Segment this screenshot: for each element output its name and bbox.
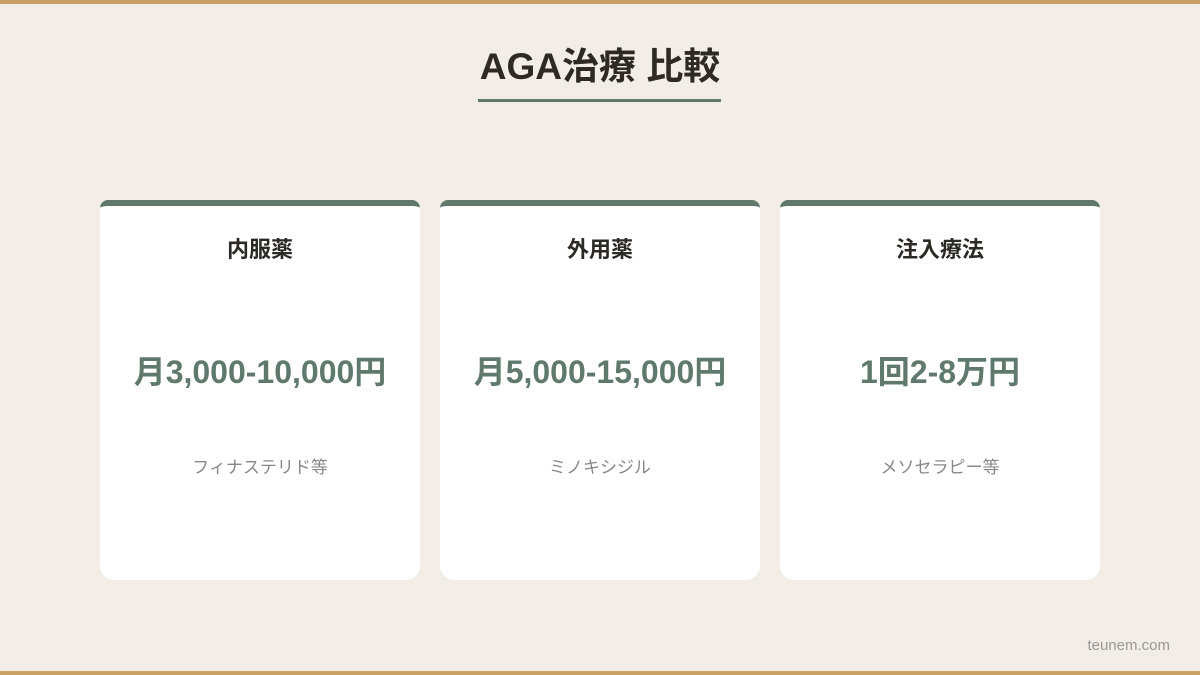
panel: 内服薬 — [100, 200, 420, 580]
title: AGA治療 比較 — [480, 46, 720, 87]
note: フィナステリド等 — [192, 458, 328, 477]
panel: 外用薬 — [440, 200, 760, 580]
card title: 外用薬 — [567, 237, 633, 262]
footer: teunem.com — [1087, 637, 1170, 654]
note: メソセラピー等 — [880, 458, 1000, 477]
price: 月3,000-10,000円 — [134, 354, 386, 390]
card title: 注入療法 — [896, 237, 984, 262]
panel: 注入療法 — [780, 200, 1100, 580]
note: ミノキシジル — [549, 458, 651, 477]
price: 1回2-8万円 — [860, 354, 1020, 390]
card title: 内服薬 — [227, 237, 293, 262]
price: 月5,000-15,000円 — [474, 354, 726, 390]
